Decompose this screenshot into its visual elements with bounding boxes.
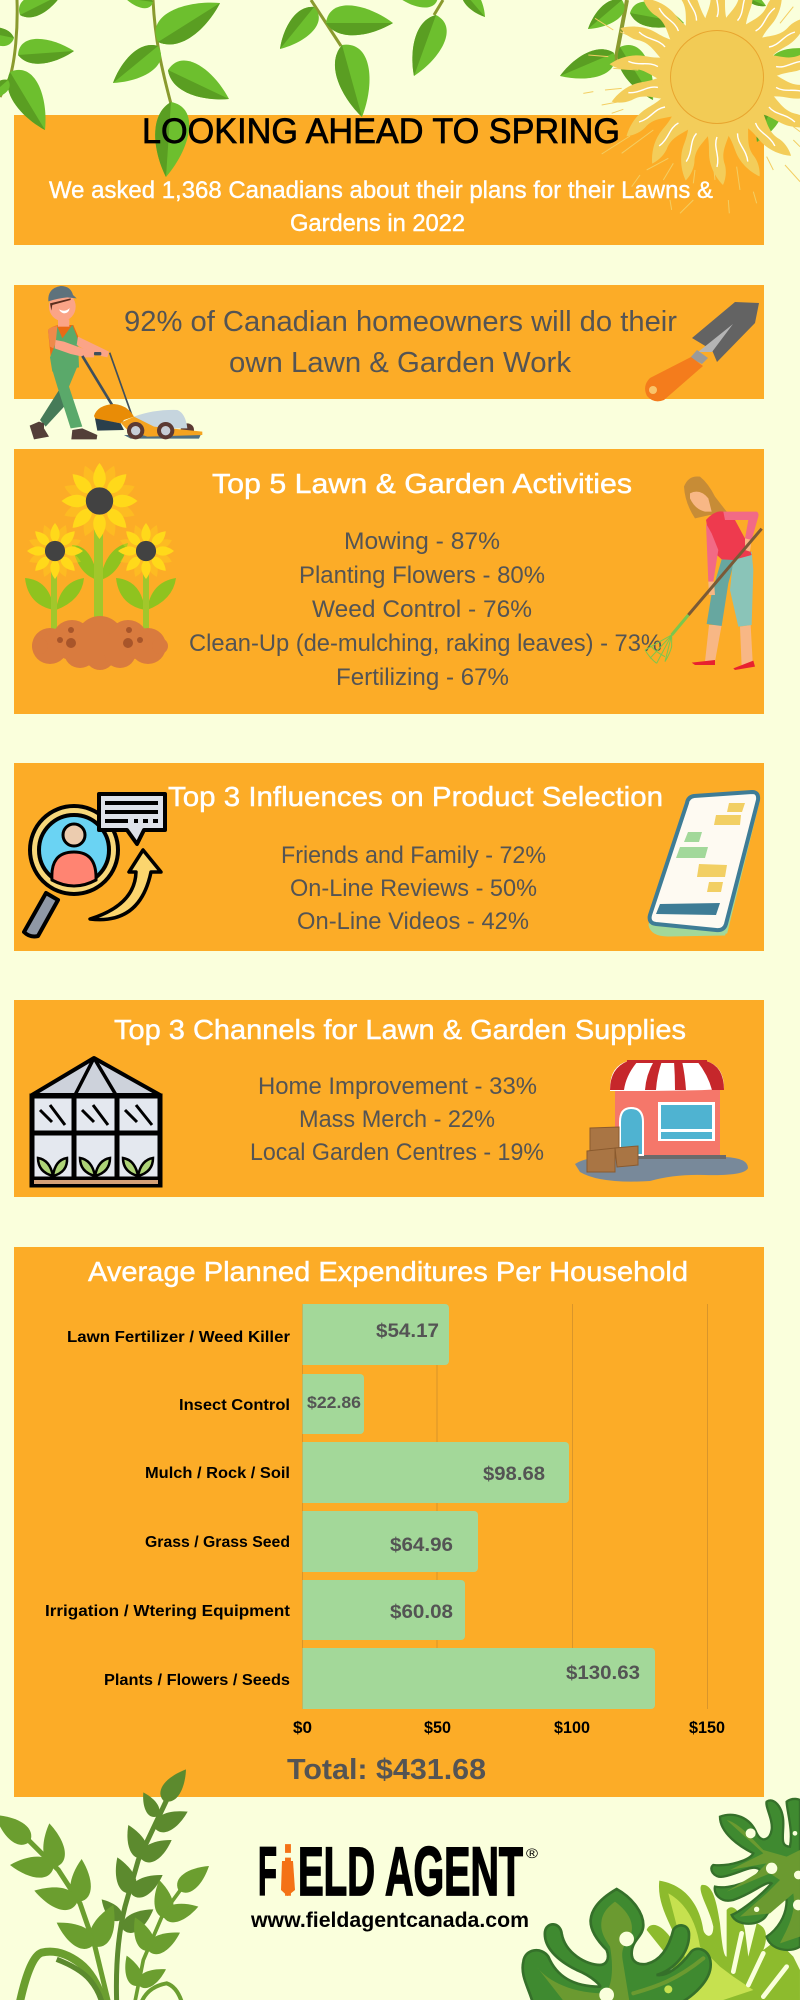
icon: man mowing [30,286,202,439]
activities list: Planting Flowers - 80% [299,562,545,589]
bars [302,1304,655,1709]
panel: channels [14,1000,764,1197]
category labels: Grass / Grass Seed [145,1534,290,1551]
intro text: Gardens in 2022 [290,210,465,237]
value labels [307,1321,640,1684]
influences list: On-Line Reviews - 50% [290,875,537,902]
logo: Field Agent: AGENT [385,1833,523,1910]
influences list [281,842,546,935]
panel: expenditures [14,1247,764,1797]
activities list: Mowing - 87% [344,528,500,555]
panel: activities [14,449,764,714]
icon: woman raking [645,476,762,670]
influences list: Friends and Family - 72% [281,842,546,869]
icon: storefront [575,1060,748,1182]
logo: Field Agent: F [258,1833,277,1910]
activities list [189,528,662,691]
value labels: $98.68 [483,1464,545,1485]
website: www.fieldagentcanada.com [250,1909,529,1932]
icon: magnifier with review [24,794,165,936]
category labels: Irrigation / Wtering Equipment [45,1603,291,1620]
logo: Field Agent: i [283,1833,293,1910]
influences list: On-Line Videos - 42% [297,908,529,935]
dark monstera leaf [523,1889,711,2000]
channels heading: Top 3 Channels for Lawn & Garden Supplies [114,1014,686,1045]
axis labels: $50 [424,1719,451,1737]
fern plant [0,1764,215,2000]
icon: sunflowers [25,463,176,670]
icon: greenhouse [32,1058,160,1185]
hanging vines [0,0,800,178]
icon: smartphone [650,792,758,935]
category labels: Insect Control [179,1397,290,1414]
expenditures heading: Average Planned Expenditures Per Household [88,1256,688,1287]
panel: intro background [14,115,764,245]
value labels: $60.08 [390,1602,453,1623]
channels list [250,1073,544,1166]
intro text: We asked 1,368 Canadians about their plans for their Lawns & [49,177,713,204]
panel: homeowners [14,285,764,439]
logo: Field Agent: ® [526,1845,539,1861]
category labels: Lawn Fertilizer / Weed Killer [67,1329,290,1346]
logo: Field Agent [258,1833,539,1910]
homeowners statement: 92% of Canadian homeowners will do their [124,306,677,338]
right monstera leaf [711,1799,800,1950]
activities heading: Top 5 Lawn & Garden Activities [212,468,632,499]
value labels: $54.17 [376,1321,439,1342]
axis labels: $150 [689,1719,725,1737]
icon: sun [583,0,800,213]
total: Total: $431.68 [287,1754,486,1786]
channels list: Mass Merch - 22% [299,1106,495,1133]
icon: trowel [645,302,759,401]
channels list: Home Improvement - 33% [258,1073,537,1100]
influences heading: Top 3 Influences on Product Selection [168,781,663,812]
axis labels: $100 [554,1719,590,1737]
value labels: $22.86 [307,1393,361,1412]
homeowners statement [124,306,677,379]
activities list: Fertilizing - 67% [336,664,509,691]
activities list: Clean-Up (de-mulching, raking leaves) - 73% [189,630,662,657]
category labels: Plants / Flowers / Seeds [104,1672,290,1689]
channels list: Local Garden Centres - 19% [250,1139,544,1166]
value labels: $64.96 [390,1535,453,1556]
logo: Field Agent: ELD [298,1833,375,1910]
category labels [45,1329,291,1689]
light monstera leaf [647,1881,800,2000]
axis labels: $0 [293,1719,312,1737]
activities list: Weed Control - 76% [312,596,532,623]
homeowners statement: own Lawn & Garden Work [229,347,571,379]
bar chart [45,1304,725,1737]
value labels: $130.63 [566,1663,640,1684]
category labels: Mulch / Rock / Soil [145,1465,290,1482]
intro text [49,177,713,237]
panel: influences [14,763,764,951]
axis labels [293,1719,725,1737]
title: LOOKING AHEAD TO SPRING [142,112,620,151]
